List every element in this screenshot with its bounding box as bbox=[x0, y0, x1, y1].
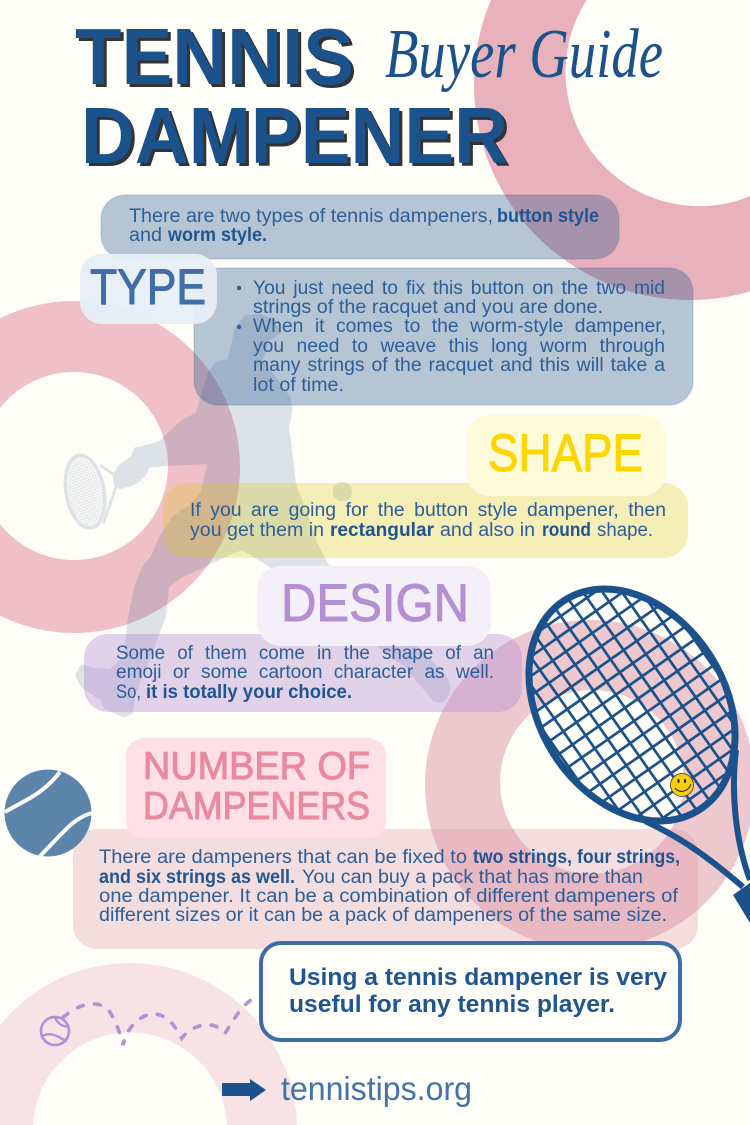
number text box bbox=[73, 829, 698, 949]
type intro text: button style bbox=[497, 206, 599, 227]
shape text: round bbox=[542, 520, 591, 541]
number text bbox=[99, 847, 680, 926]
panel: shape bbox=[163, 415, 688, 558]
shape heading chip: SHAPE bbox=[488, 424, 643, 483]
design text bbox=[116, 643, 494, 703]
type bullet list: you need to weave this long worm through bbox=[253, 336, 665, 357]
racquet frame bbox=[487, 550, 750, 860]
shape text box bbox=[163, 483, 688, 558]
callout bbox=[261, 943, 680, 1040]
racquet strings bbox=[532, 592, 732, 818]
design text: So, bbox=[116, 682, 141, 703]
small ball bbox=[41, 1017, 69, 1045]
type details box bbox=[194, 268, 693, 405]
number heading chip: DAMPENERS bbox=[143, 785, 370, 828]
design text: emoji or some cartoon character as well. bbox=[116, 662, 494, 683]
type bullet list: strings of the racquet and you are done. bbox=[253, 297, 603, 318]
number text: one dampener. It can be a combination of different dampeners of bbox=[99, 886, 679, 907]
ring: lower right bbox=[425, 620, 750, 950]
type bullet list: When it comes to the worm-style dampener, bbox=[253, 316, 666, 337]
type intro text: worm style. bbox=[167, 225, 267, 246]
ring: left bbox=[0, 301, 240, 633]
type heading chip: TYPE bbox=[90, 259, 206, 315]
shape text: you get them in bbox=[190, 520, 324, 541]
type bullet list: lot of time. bbox=[253, 375, 344, 396]
heading: TENNIS: TENNIS bbox=[75, 12, 354, 101]
design heading chip bbox=[257, 566, 491, 646]
icon: bouncing ball with dashed trail bbox=[41, 997, 257, 1045]
design text box bbox=[84, 634, 522, 712]
shape text: and also in bbox=[440, 520, 535, 541]
subtitle: Buyer Guide: Buyer Guide bbox=[385, 16, 663, 93]
number text: two strings, four strings, bbox=[473, 847, 680, 868]
type intro text: and bbox=[129, 225, 162, 246]
callout: Using a tennis dampener is very bbox=[289, 964, 668, 991]
type bullet list: many strings of the racquet and this will take a bbox=[253, 355, 665, 376]
silhouette: tennis player with racquet and ball bbox=[60, 315, 450, 717]
icon: arrow bbox=[222, 1079, 266, 1101]
shape text bbox=[190, 500, 666, 541]
shape text: shape. bbox=[597, 520, 653, 541]
racquet throat and grip bbox=[645, 750, 750, 887]
title bbox=[75, 12, 663, 180]
panel: design bbox=[84, 566, 522, 712]
design text: Some of them come in the shape of an bbox=[116, 643, 494, 664]
website footer: tennistips.org bbox=[281, 1070, 472, 1107]
panel: number of dampeners bbox=[73, 738, 698, 949]
callout: useful for any tennis player. bbox=[289, 991, 615, 1018]
ring: bottom left bbox=[0, 963, 297, 1125]
heading: DAMPENER: DAMPENER bbox=[81, 91, 508, 180]
number text: There are dampeners that can be fixed to bbox=[99, 847, 467, 868]
shape text: If you are going for the button style dampener, then bbox=[190, 500, 666, 521]
number heading chip bbox=[126, 738, 386, 838]
number heading chip: NUMBER OF bbox=[143, 745, 370, 788]
icon: tennis ball bbox=[4, 770, 92, 856]
number text: different sizes or it can be a pack of dampeners of the same size. bbox=[99, 905, 667, 926]
icon: large tennis racquet with dampener bbox=[525, 586, 750, 923]
type intro text: There are two types of tennis dampeners, bbox=[129, 206, 493, 227]
type bullet list bbox=[237, 278, 666, 396]
design heading chip: DESIGN bbox=[281, 574, 469, 633]
shape text: rectangular bbox=[330, 520, 435, 541]
type bullet list: You just need to fix this button on the two mid bbox=[253, 278, 665, 299]
type intro box bbox=[101, 195, 619, 259]
shape heading chip bbox=[467, 415, 665, 496]
icon: smiley dampener bbox=[670, 774, 694, 796]
design text: it is totally your choice. bbox=[146, 682, 352, 703]
number text: You can buy a pack that has more than bbox=[302, 867, 643, 888]
type intro text bbox=[129, 206, 599, 246]
dashed bounce trail bbox=[63, 997, 257, 1045]
ring: top right bbox=[474, 0, 750, 300]
number text: and six strings as well. bbox=[99, 867, 295, 888]
panel: type bbox=[80, 195, 693, 405]
